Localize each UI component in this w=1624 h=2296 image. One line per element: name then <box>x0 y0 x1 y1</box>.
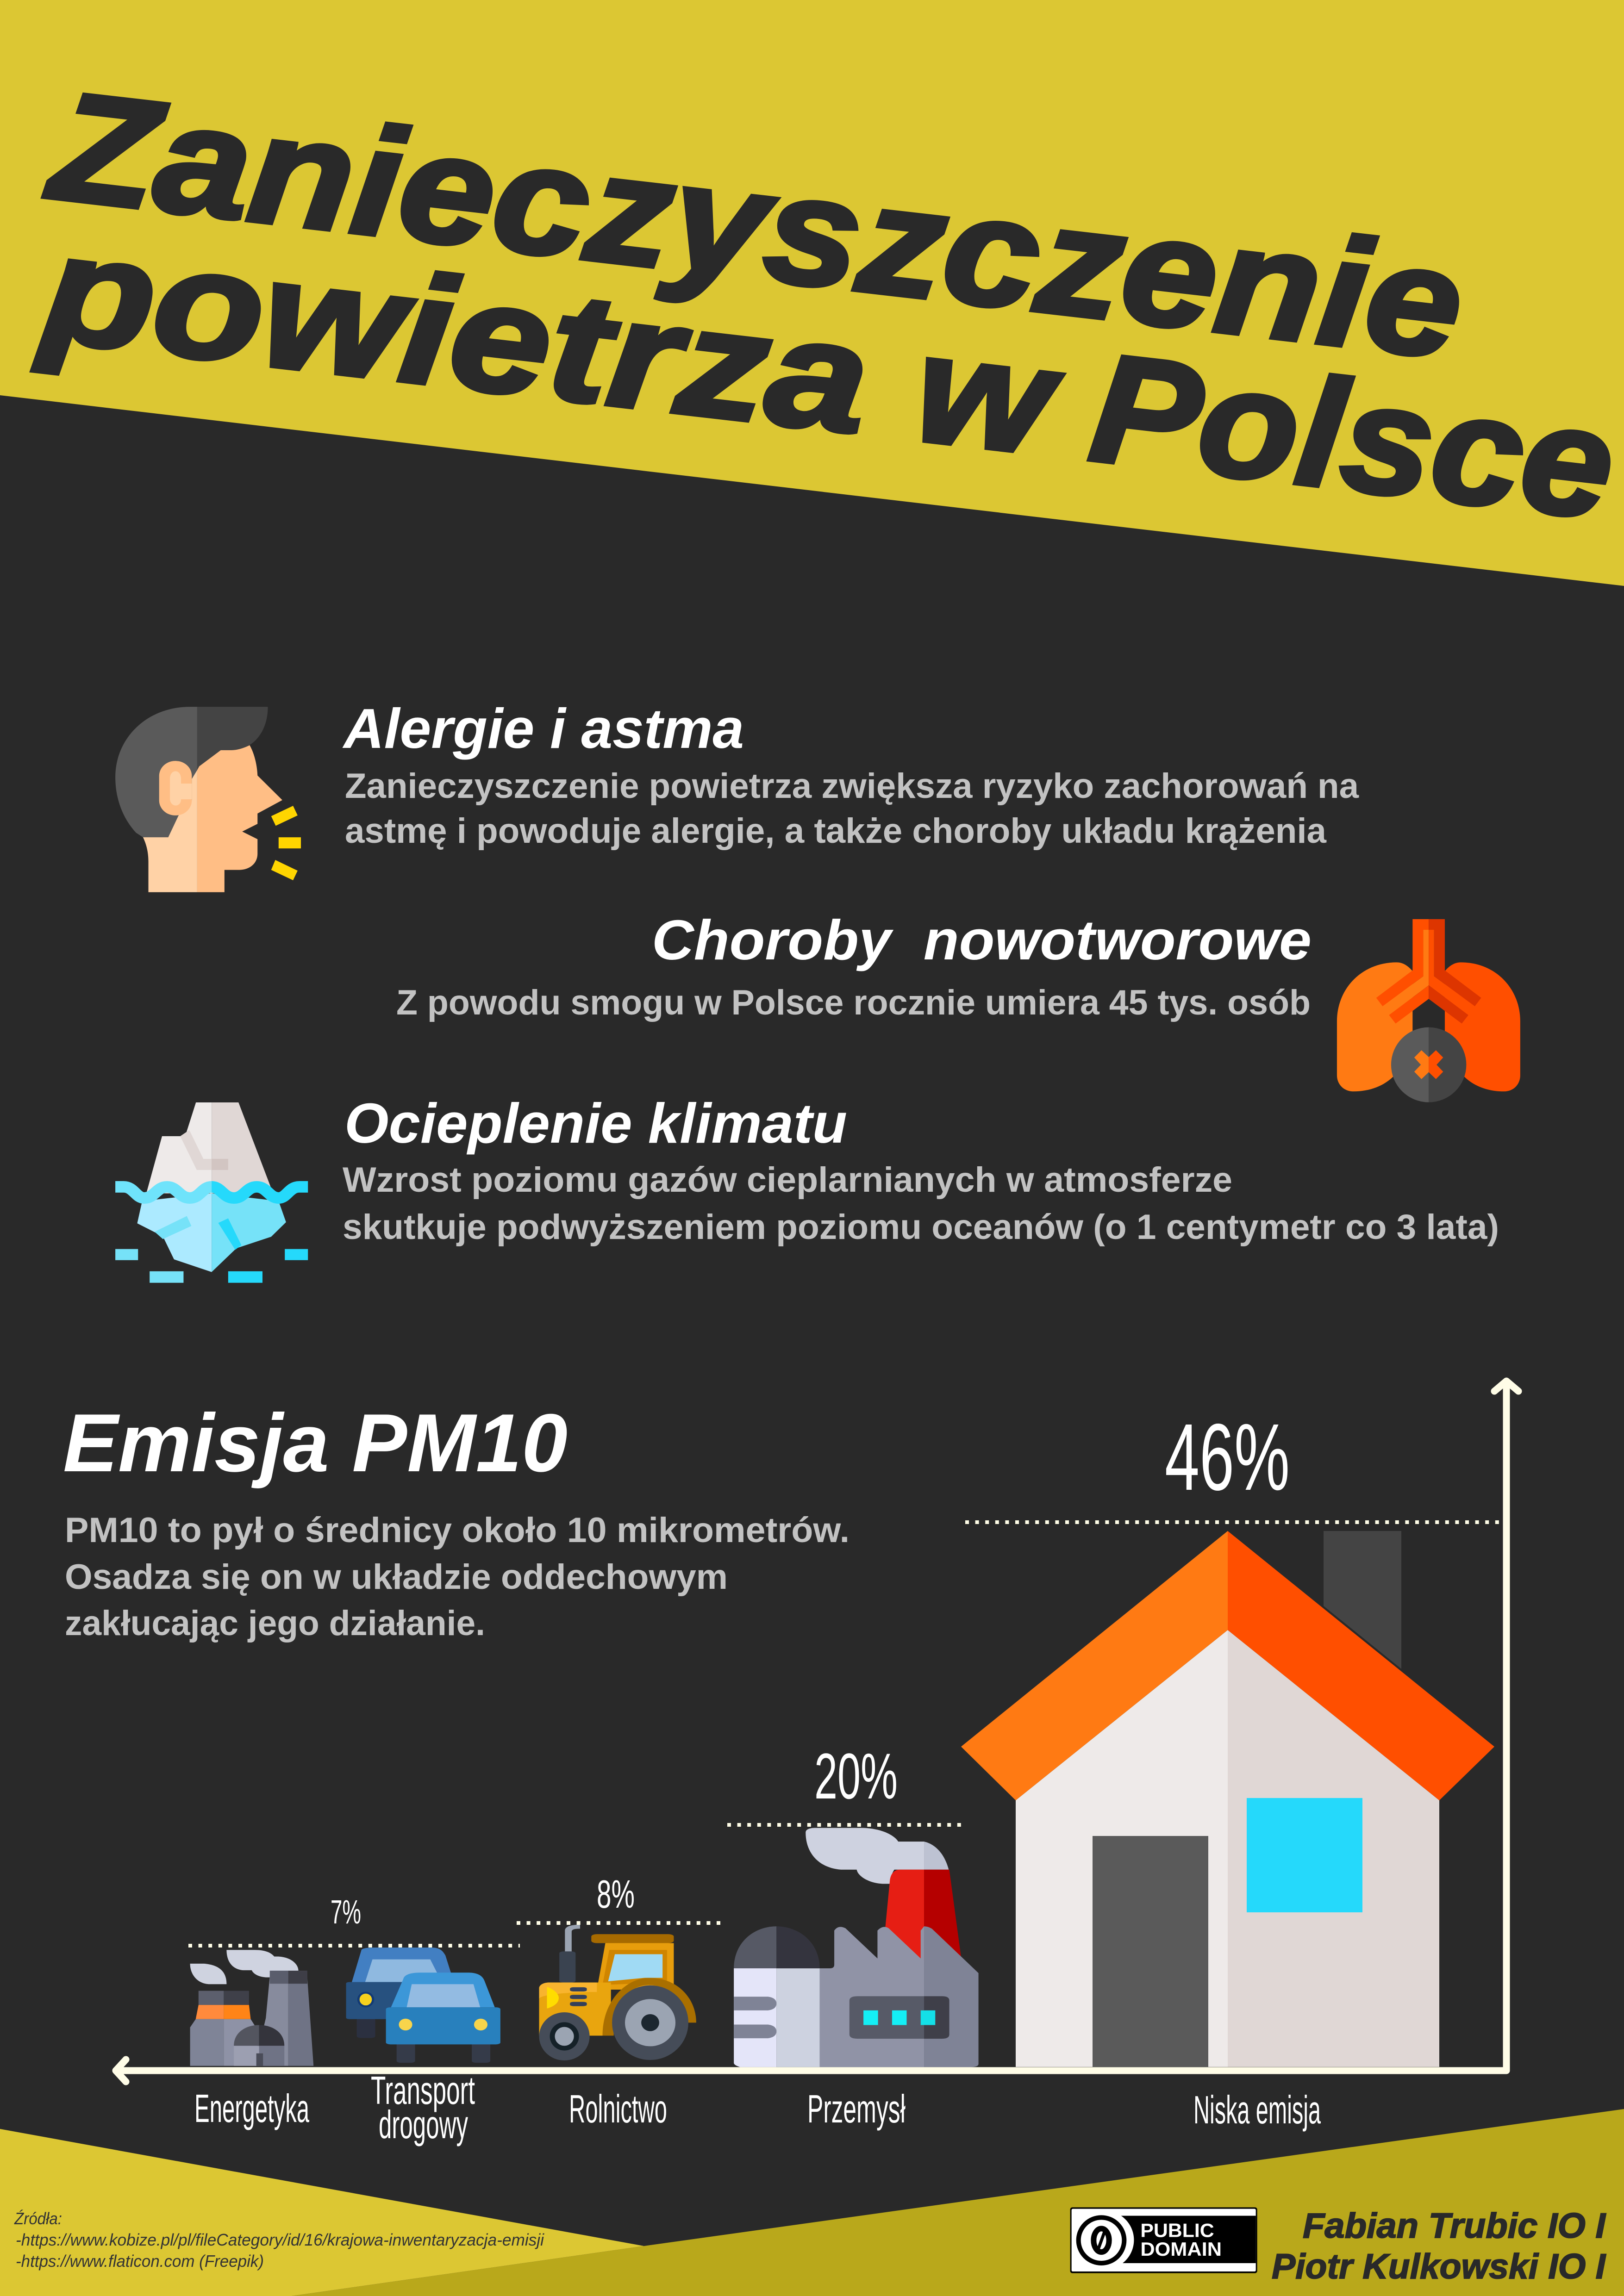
text block: Alergie i astma: astmę i powoduje alergie, a także choroby układu krążenia <box>345 811 1327 851</box>
title: Zanieczyszczenie <box>38 59 1471 392</box>
axis label: Transport drogowy: Transport <box>371 2069 475 2113</box>
axis label: Transport drogowy <box>371 2069 475 2147</box>
value: 20%: 20% <box>814 1740 898 1812</box>
text block: Alergie i astma <box>345 766 1359 851</box>
text block: PM10 description: Osadza się on w układzie oddechowym <box>65 1557 728 1597</box>
footer yellow triangle left <box>0 2129 644 2296</box>
axis label: Przemysł: Przemysł <box>807 2087 906 2131</box>
footer olive triangle right <box>292 2109 1624 2296</box>
text block: PM10 description: PM10 to pył o średnicy około 10 mikrometrów. <box>65 1511 849 1550</box>
heading: Ocieplenie klimatu: Ocieplenie klimatu <box>344 1092 847 1155</box>
text block: Ocieplenie klimatu: skutkuje podwyższeniem poziomu oceanów (o 1 centymetr co 3 lata) <box>343 1207 1499 1247</box>
text block: Ocieplenie klimatu <box>343 1160 1499 1247</box>
chart axes with arrows <box>116 1381 1518 2082</box>
text block: PM10 description <box>65 1511 849 1643</box>
text block: Ocieplenie klimatu: Wzrost poziomu gazów cieplarnianych w atmosferze <box>343 1160 1232 1200</box>
sources: -https://www.kobize.pl/pl/fileCategory/id/16/krajowa-inwentaryzacja-emisji <box>16 2230 544 2249</box>
value: 7%: 7% <box>331 1894 361 1931</box>
sources <box>14 2209 544 2271</box>
axis label: Niska emisja: Niska emisja <box>1193 2088 1321 2132</box>
public domain badge: DOMAIN <box>1140 2239 1222 2260</box>
title: powietrza <box>31 201 877 467</box>
value: 8%: 8% <box>597 1873 635 1916</box>
title <box>31 59 1622 551</box>
text block: PM10 description: zakłucając jego działanie. <box>65 1604 485 1643</box>
heading: Choroby nowotworowe: Choroby nowotworowe <box>652 908 1312 971</box>
icon: factory <box>734 1828 979 2067</box>
axis label: Transport drogowy: drogowy <box>379 2103 468 2147</box>
icon: coughing person <box>115 707 301 892</box>
authors: Fabian Trubic IO I <box>1303 2206 1606 2246</box>
icon: tractor <box>539 1925 696 2060</box>
icon: house <box>961 1531 1494 2067</box>
sources: -https://www.flaticon.com (Freepik) <box>16 2252 264 2271</box>
dotted level lines <box>188 1522 1505 1946</box>
text block: Alergie i astma: Zanieczyszczenie powietrza zwiększa ryzyko zachorowań na <box>345 766 1359 806</box>
sources: Źródła: <box>14 2209 62 2228</box>
authors: Piotr Kulkowski IO I <box>1272 2247 1606 2286</box>
text block: Choroby nowotworowe: Z powodu smogu w Polsce rocznie umiera 45 tys. osób <box>396 983 1311 1022</box>
icon: melting iceberg <box>115 1102 308 1283</box>
heading: Alergie i astma: Alergie i astma <box>342 697 744 760</box>
value: 46%: 46% <box>1165 1404 1290 1510</box>
public domain badge <box>1070 2207 1257 2273</box>
icon: cars <box>346 1948 500 2063</box>
axis label: Rolnictwo: Rolnictwo <box>569 2087 667 2131</box>
icon: power plant <box>190 1950 313 2066</box>
axis label: Energetyka: Energetyka <box>194 2087 309 2131</box>
icon: lungs <box>1337 919 1520 1102</box>
public domain badge: PUBLIC <box>1140 2220 1214 2241</box>
authors <box>1272 2206 1606 2286</box>
heading: Emisja PM10: Emisja PM10 <box>63 1397 568 1489</box>
title: w <box>907 301 1071 488</box>
yellow header band <box>0 0 1624 586</box>
title: Polsce <box>1083 321 1622 551</box>
